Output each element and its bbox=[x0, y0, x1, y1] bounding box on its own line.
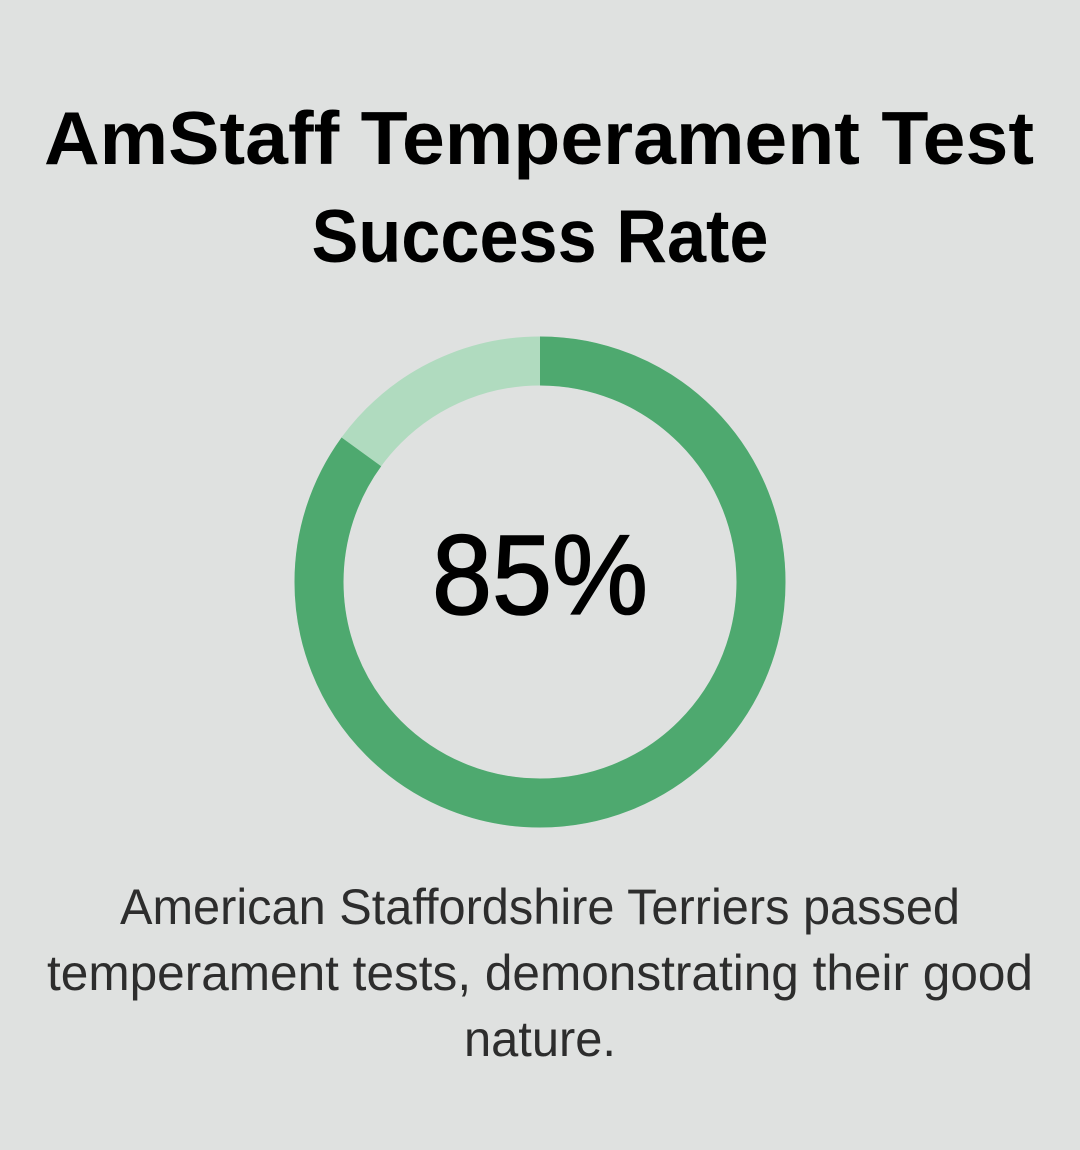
title: AmStaff Temperament Test bbox=[44, 96, 1034, 180]
center value: 85% bbox=[432, 512, 648, 638]
donut remainder segment bbox=[319, 361, 761, 803]
title bbox=[44, 96, 1034, 278]
description text: American Staffordshire Terriers passed bbox=[120, 879, 960, 935]
donut value segment bbox=[319, 361, 761, 803]
donut chart: 85% bbox=[319, 361, 761, 803]
description text: temperament tests, demonstrating their good bbox=[47, 945, 1033, 1001]
description text: nature. bbox=[464, 1011, 616, 1067]
title: Success Rate bbox=[312, 194, 768, 278]
description text bbox=[47, 879, 1033, 1067]
